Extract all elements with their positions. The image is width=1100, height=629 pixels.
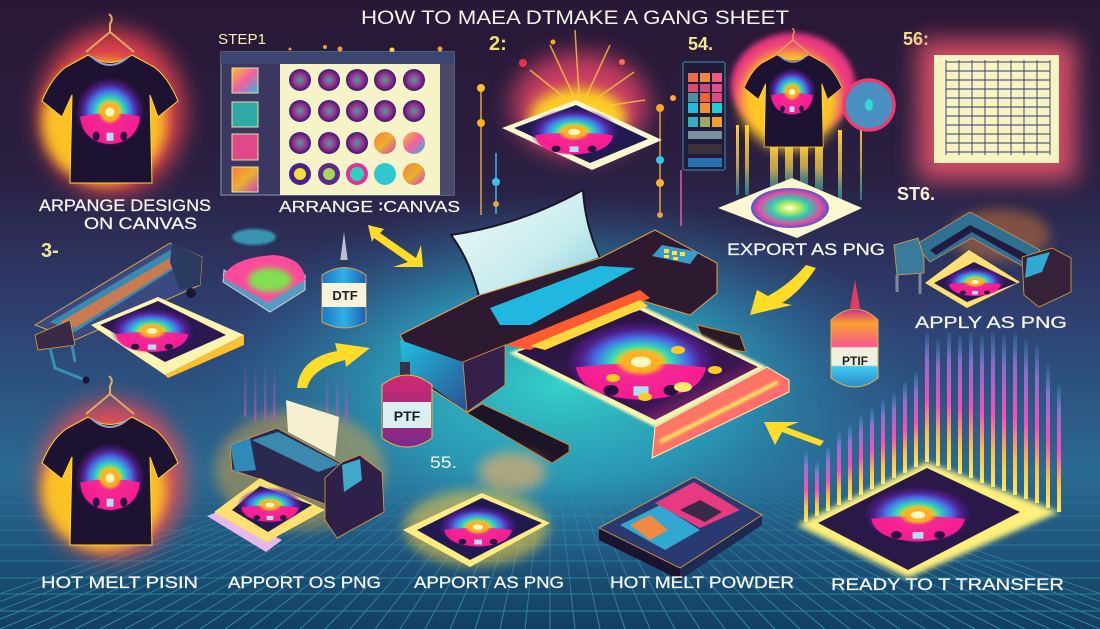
- title: HOW TO MAEA DTMAKE A GANG SHEET: [361, 8, 789, 29]
- step 3 number: 3-: [41, 240, 59, 262]
- design circles: [289, 69, 425, 185]
- right printer: [894, 209, 1071, 308]
- spray above lower sheet: [478, 452, 546, 492]
- leg block: [467, 404, 569, 463]
- step 6 label: ST6.: [897, 184, 935, 204]
- lens: [844, 80, 894, 130]
- bottom labels: APPORT OS PNG: [228, 573, 381, 592]
- label: export as png: EXPORT AS PNG: [727, 240, 885, 259]
- thumbnails: [232, 68, 258, 192]
- bottle: PTF lower: [382, 362, 432, 447]
- transfer sheet with light bars: [797, 332, 1061, 578]
- bottle: PTIF right: PTIF: [842, 354, 868, 368]
- label: arrange designs on canvas: ARPANGE DESIGNS: [39, 196, 211, 215]
- bottle: DTF top: DTF: [332, 288, 358, 303]
- floor grid: [0, 480, 1100, 629]
- export sheet: [718, 178, 862, 238]
- bottom labels: HOT MELT POWDER: [610, 573, 794, 592]
- app tablet: [681, 62, 725, 226]
- arrow: export to printer: [750, 265, 816, 315]
- central printer: [400, 190, 789, 463]
- back leg: [697, 325, 746, 352]
- step 2 burst sheet: [502, 30, 662, 170]
- bottle: PTIF right: [831, 280, 878, 387]
- stacked sheets: [223, 255, 305, 312]
- step 1 label: STEP1: [218, 31, 266, 48]
- t-shirt: top left: [40, 14, 184, 194]
- label: arrange designs on canvas: ON CANVAS: [84, 214, 197, 233]
- printed sheet: [509, 305, 767, 427]
- t-shirt export: [731, 28, 862, 200]
- spray near stacked sheets: [232, 229, 276, 245]
- lower left printer: [207, 362, 385, 552]
- label: arrange designs on canvas: [39, 196, 211, 233]
- step 55: 55.: [430, 453, 457, 472]
- step number 5 top: 54.: [688, 34, 713, 54]
- bottom labels: [41, 573, 1064, 594]
- paper: [451, 190, 600, 300]
- bottom labels: READY TO T TRANSFER: [831, 575, 1064, 594]
- bottle: PTF lower: PTF: [394, 408, 421, 424]
- label: apply as png: APPLY AS PNG: [915, 313, 1067, 332]
- step number top right: 56:: [903, 29, 929, 49]
- bottom labels: APPORT AS PNG: [414, 573, 564, 592]
- canvas panel: [221, 45, 454, 195]
- arrow: transfer to printer: [764, 422, 824, 446]
- left wide printer: [35, 243, 244, 384]
- arrow: canvas to printer: [368, 225, 423, 267]
- bottle: DTF top: [322, 232, 366, 328]
- step 2 number: 2:: [489, 33, 507, 55]
- roller: [652, 367, 789, 458]
- arrow: lower printer to centre: [297, 343, 370, 388]
- timeline dots: [477, 40, 676, 218]
- body: [400, 230, 717, 412]
- hot melt powder device: [599, 477, 762, 580]
- grid sheet: [918, 40, 1076, 180]
- label: arrange canvas: ARRANGE ∶CANVAS: [279, 199, 460, 216]
- lower left t-shirt: [40, 376, 184, 558]
- lower sheet: [403, 490, 550, 567]
- bottom labels: HOT MELT PISIN: [41, 573, 198, 592]
